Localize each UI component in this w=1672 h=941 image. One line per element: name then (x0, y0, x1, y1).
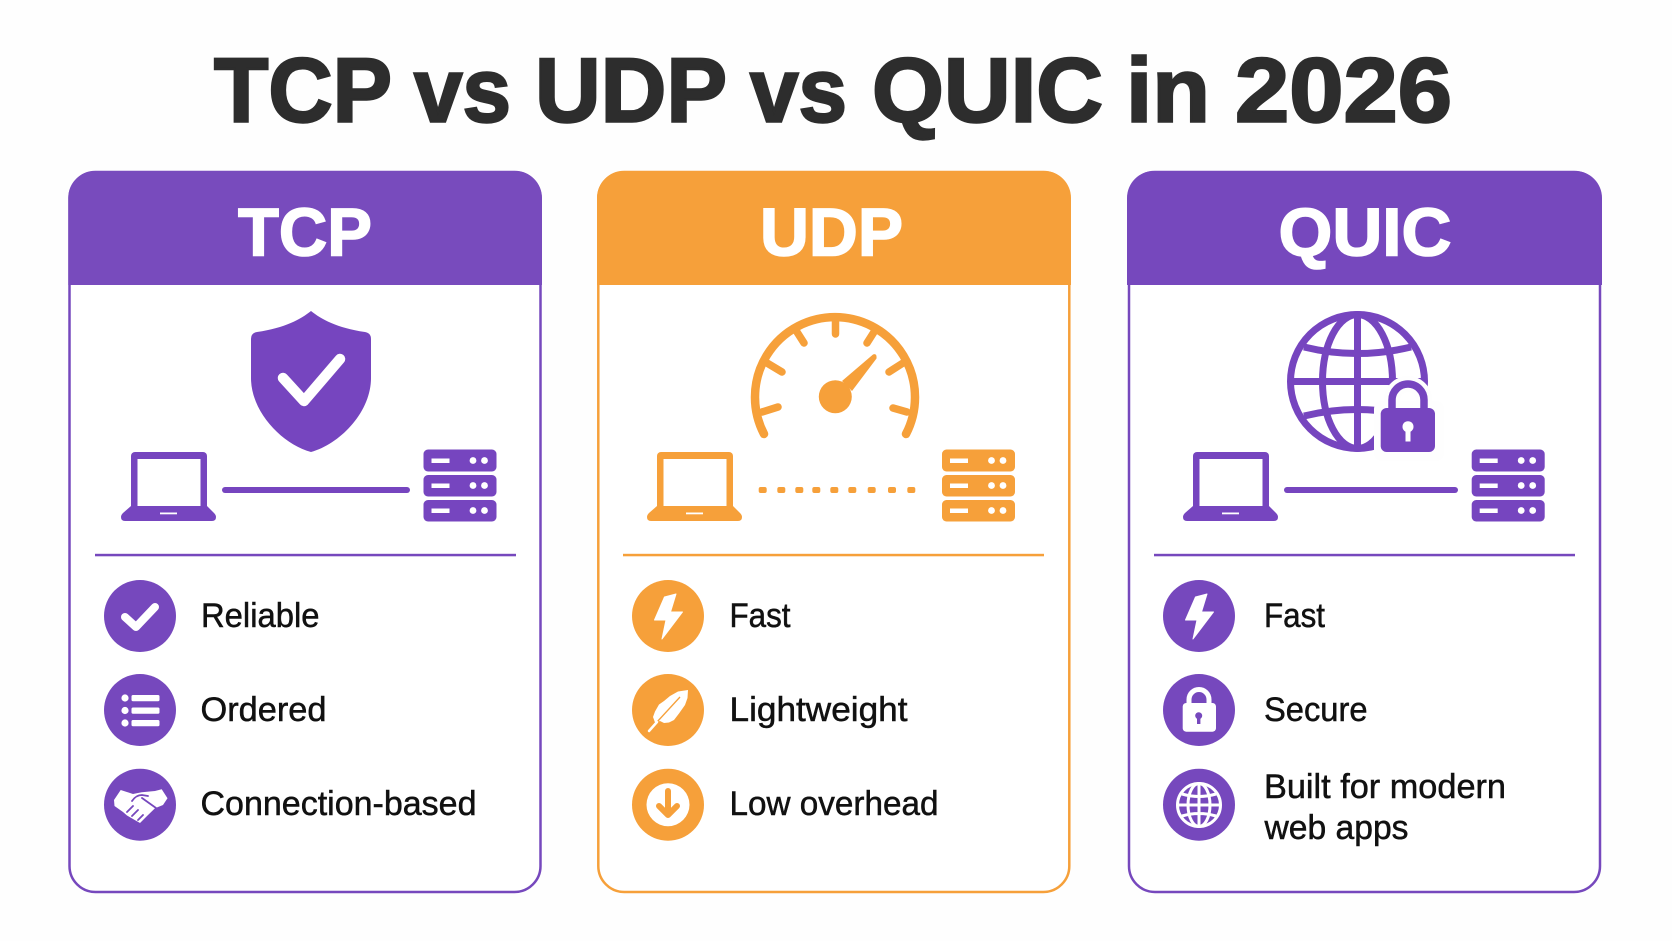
header band: TCP (68, 171, 542, 285)
feature: Fast (632, 580, 791, 652)
feature: Secure: Secure (1264, 691, 1368, 729)
feature: Built for modern web apps (1163, 768, 1506, 847)
feature: Ordered: Ordered (200, 691, 326, 729)
panel: UDP (597, 171, 1071, 892)
icon: speedometer gauge (755, 317, 915, 434)
divider (623, 554, 1044, 556)
icon: laptop (1183, 452, 1278, 521)
panel: TCP (68, 171, 542, 892)
feature: Secure (1163, 674, 1368, 746)
card body (70, 172, 540, 892)
feature: Lightweight: Lightweight (730, 691, 908, 729)
feature: Fast: Fast (730, 597, 791, 635)
feature: Lightweight (632, 674, 908, 746)
title: vs (750, 40, 847, 142)
header band: UDP: UDP (760, 194, 903, 270)
feature: Fast (1163, 580, 1326, 652)
header band: QUIC (1127, 171, 1602, 285)
title: TCP (214, 40, 392, 142)
feature: Ordered (104, 674, 326, 746)
feature: Low overhead: Low overhead (730, 785, 938, 823)
title: 2026 (1235, 40, 1452, 142)
feature: Connection-based: Connection-based (200, 785, 476, 823)
feature: Connection-based (104, 769, 476, 841)
icon: server rack (1472, 450, 1545, 522)
icon: shield with check (251, 311, 371, 452)
feature: Built for modern web apps: web apps (1264, 809, 1408, 847)
feature: Low overhead (632, 769, 938, 841)
feature: Fast: Fast (1264, 597, 1326, 635)
connection line: solid (1284, 487, 1458, 493)
icon: laptop (647, 452, 742, 521)
title: vs (414, 40, 511, 142)
divider (95, 554, 516, 556)
title: QUIC (872, 40, 1103, 142)
feature: Reliable: Reliable (201, 597, 320, 635)
feature: Reliable (104, 580, 320, 652)
title: in (1126, 40, 1210, 142)
title: UDP (535, 40, 727, 142)
connection line: solid (222, 487, 410, 493)
feature: Built for modern web apps: Built for modern (1264, 768, 1506, 806)
card body (598, 172, 1069, 892)
header band: UDP (597, 171, 1071, 285)
icon: server rack (424, 450, 496, 522)
header band: TCP: TCP (238, 194, 372, 270)
connection line: dotted (759, 487, 915, 493)
icon: server rack (942, 450, 1015, 522)
icon: laptop (121, 452, 216, 521)
icon: globe with padlock (1290, 314, 1444, 461)
header band: QUIC: QUIC (1278, 194, 1452, 270)
panel: QUIC (1127, 171, 1602, 892)
divider (1154, 554, 1575, 556)
card body (1129, 172, 1600, 892)
title (214, 40, 1452, 142)
